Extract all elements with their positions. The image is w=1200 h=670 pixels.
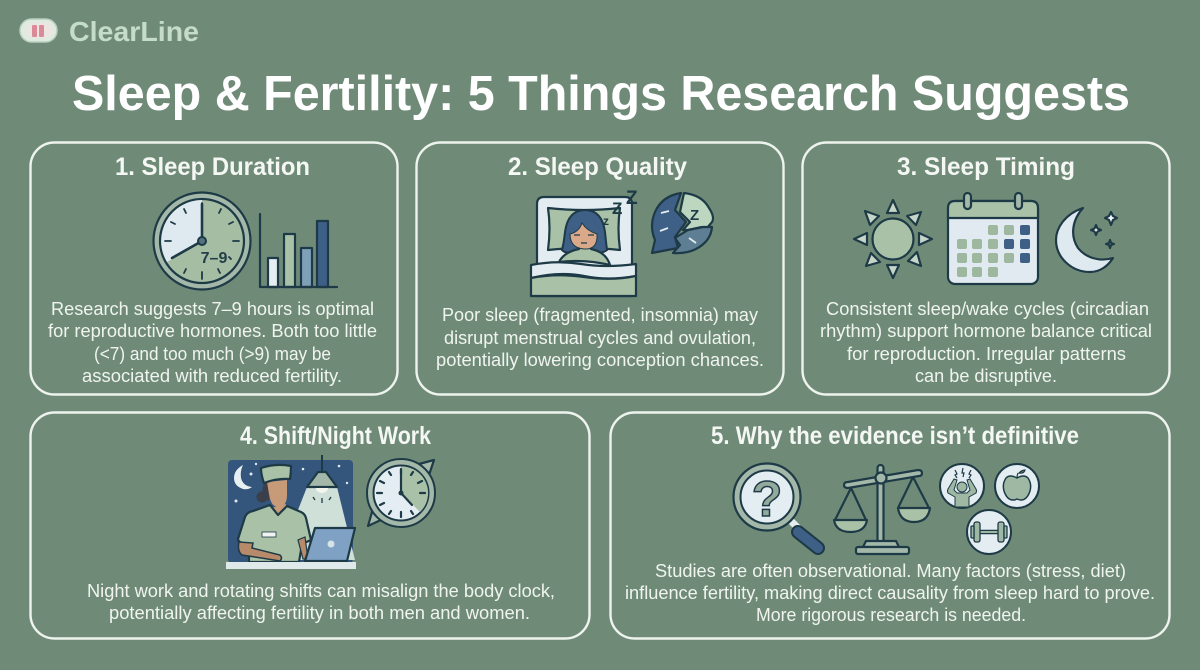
icon: magnifying glass with question mark	[734, 464, 818, 548]
text: sleep quality body: disrupt menstrual cycles and ovulation,	[444, 328, 756, 348]
text: sleep timing body	[820, 299, 1152, 386]
icon: magnifying glass with question mark: ?	[752, 471, 782, 527]
heading: sleep duration: 1. Sleep Duration	[115, 153, 310, 181]
icon: calendar	[948, 193, 1038, 284]
text: sleep timing body: can be disruptive.	[915, 366, 1057, 386]
logo: ClearLine	[69, 16, 199, 47]
icon: person sleeping in bed: z	[603, 214, 609, 228]
icon: person sleeping in bed	[531, 188, 638, 296]
icon: broken speech bubble	[652, 193, 713, 253]
icon: person sleeping in bed: Z	[626, 188, 638, 209]
text: sleep duration body: Research suggests 7–9 hours is optimal	[51, 299, 374, 319]
text: evidence body	[625, 561, 1155, 625]
icon: clock 7-9 hours: 7–9	[201, 250, 227, 267]
icon: apple	[995, 464, 1039, 508]
icon: dumbbell	[967, 510, 1011, 554]
text: shift work body: Night work and rotating shifts can misalign the body clock,	[87, 581, 555, 601]
title: Sleep & Fertility: 5 Things Research Suggests	[72, 67, 1130, 121]
panel: shift and night work	[30, 412, 590, 638]
icon: clock speech bubble	[367, 459, 435, 527]
panel: sleep timing	[802, 142, 1170, 394]
text: sleep quality body: Poor sleep (fragmented, insomnia) may	[442, 305, 758, 325]
icon: sun	[854, 200, 932, 278]
text: evidence body: influence fertility, making direct causality from sleep hard to prove.	[625, 583, 1155, 603]
icon: broken speech bubble: Z	[690, 207, 699, 224]
icon: moon and stars	[1056, 208, 1117, 272]
icon: nurse at laptop under lamp	[226, 455, 356, 569]
heading: shift and night work: 4. Shift/Night Work	[240, 422, 431, 450]
text: evidence body: More rigorous research is needed.	[756, 605, 1026, 625]
panel: why evidence isn't definitive	[610, 412, 1170, 638]
bar chart	[260, 214, 337, 287]
heading: sleep quality: 2. Sleep Quality	[508, 153, 687, 181]
text: shift work body: potentially affecting fertility in both men and women.	[109, 603, 530, 623]
heading: why evidence isn't definitive: 5. Why the evidence isn’t definitive	[711, 422, 1079, 450]
text: shift work body	[87, 581, 555, 623]
text: sleep timing body: Consistent sleep/wake cycles (circadian	[826, 299, 1149, 319]
text: sleep duration body: for reproductive hormones. Both too little	[48, 321, 377, 341]
text: sleep quality body: potentially lowering conception chances.	[436, 350, 764, 370]
panel: sleep quality	[416, 142, 784, 394]
text: sleep duration body	[48, 299, 377, 386]
text: sleep duration body: associated with reduced fertility.	[82, 366, 342, 386]
panel: sleep duration	[30, 142, 398, 394]
icon: clock 7-9 hours	[154, 192, 250, 290]
text: sleep timing body: rhythm) support hormone balance critical	[820, 321, 1152, 341]
icon: stress	[940, 464, 984, 508]
text: evidence body: Studies are often observational. Many factors (stress, diet)	[655, 561, 1126, 581]
text: sleep duration body: (<7) and too much (>9) may be	[94, 344, 331, 364]
icon: balance scale	[834, 465, 930, 554]
heading: sleep timing: 3. Sleep Timing	[897, 153, 1075, 181]
text: sleep timing body: for reproduction. Irregular patterns	[847, 344, 1126, 364]
text: sleep quality body	[436, 305, 764, 370]
icon: person sleeping in bed: Z	[612, 199, 622, 218]
